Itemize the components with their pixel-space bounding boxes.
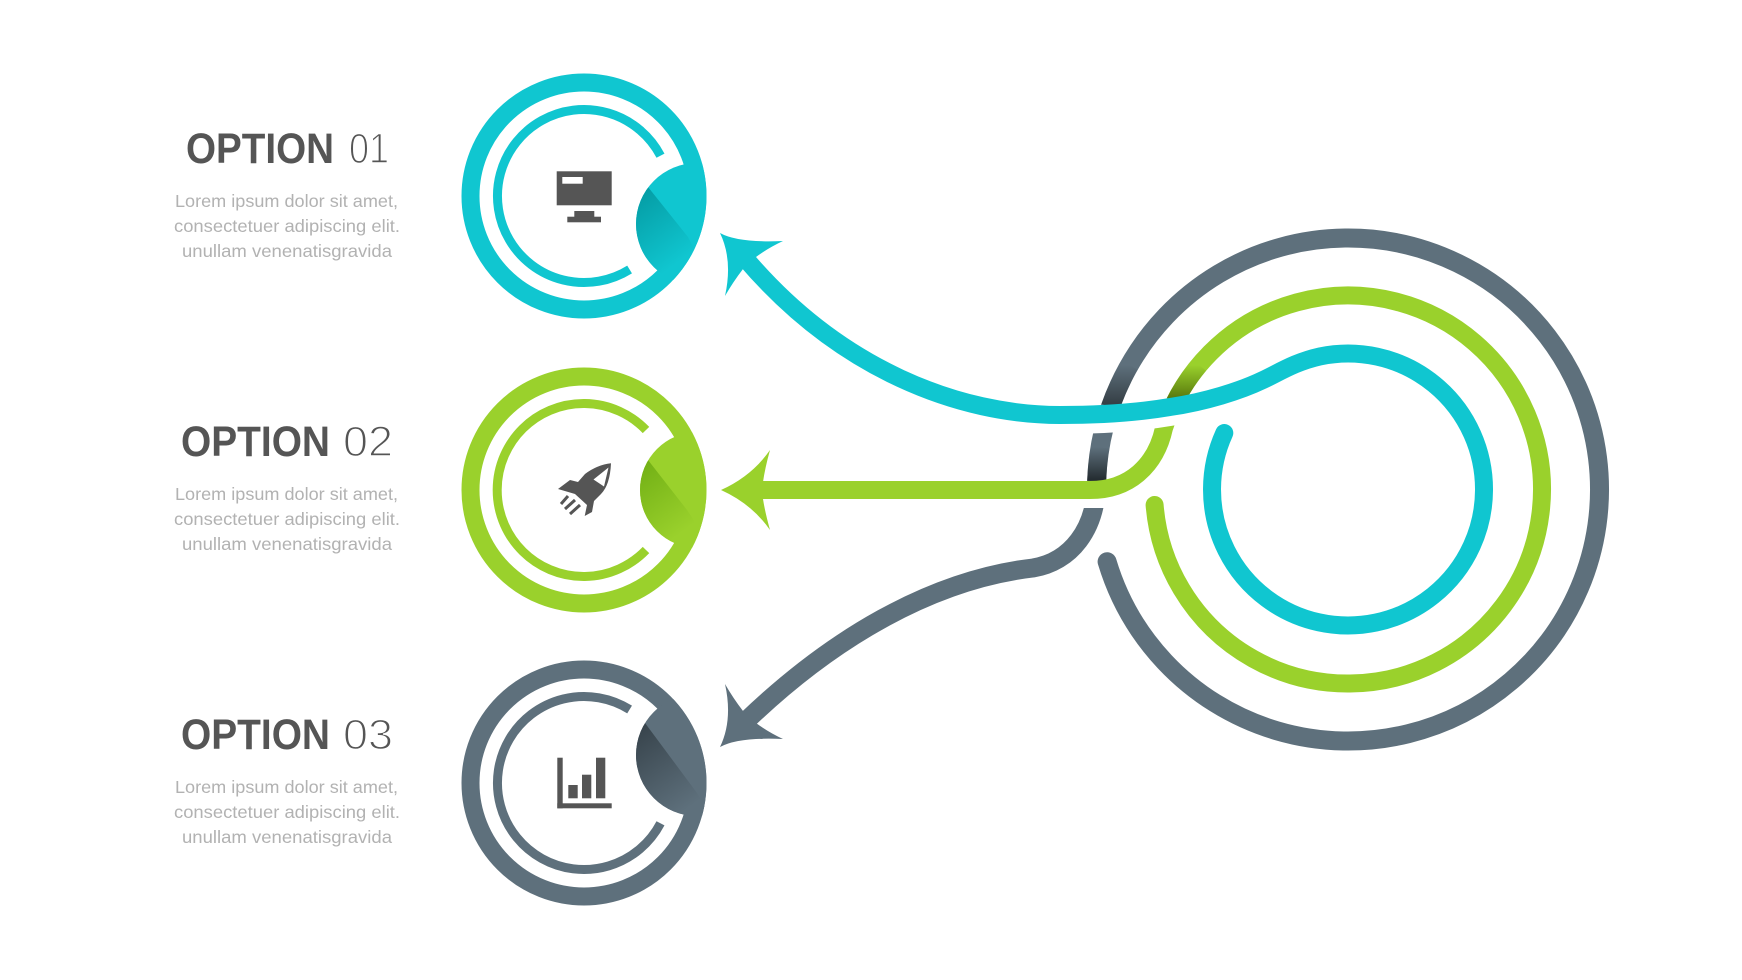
arrow head: green [721,450,770,530]
white gap below cyan crossing [1060,401,1230,425]
icon: rocket [558,463,611,516]
text block: option 03: unullam venenatisgravida [182,827,392,847]
text block: option 02: OPTION [181,418,330,466]
text block: option 03: 03 [343,711,393,759]
text block: option 02: 02 [343,418,393,466]
text block: option 01: unullam venenatisgravida [182,241,392,261]
text block: option 01 [174,125,400,261]
cyan ring and path to option 01 [745,258,1484,625]
large concentric rings with arrows [745,238,1600,741]
text block: option 01: 01 [349,125,389,173]
text block: option 02 [174,418,400,554]
panel: option 01 badge [470,82,758,310]
arrow head: cyan [720,233,783,296]
text block: option 02: consectetuer adipiscing elit. [174,509,400,529]
grey ring and path to option 03 [745,238,1600,741]
arrow head: grey [720,684,783,747]
icon: monitor [557,171,612,222]
green ring and path to option 02 [760,296,1542,684]
text block: option 03: OPTION [181,711,330,759]
text block: option 03 [174,711,400,847]
text block: option 03: Lorem ipsum dolor sit amet, [175,777,398,797]
text block: option 01: OPTION [186,125,334,173]
text block: option 02: unullam venenatisgravida [182,534,392,554]
panel: option 02 badge [470,376,756,604]
text block: option 01: consectetuer adipiscing elit. [174,216,400,236]
text block: option 03: consectetuer adipiscing elit. [174,802,400,822]
icon: bar chart [557,758,612,808]
text block: option 01: Lorem ipsum dolor sit amet, [175,191,398,211]
panel: option 03 badge [470,670,758,896]
text block: option 02: Lorem ipsum dolor sit amet, [175,484,398,504]
